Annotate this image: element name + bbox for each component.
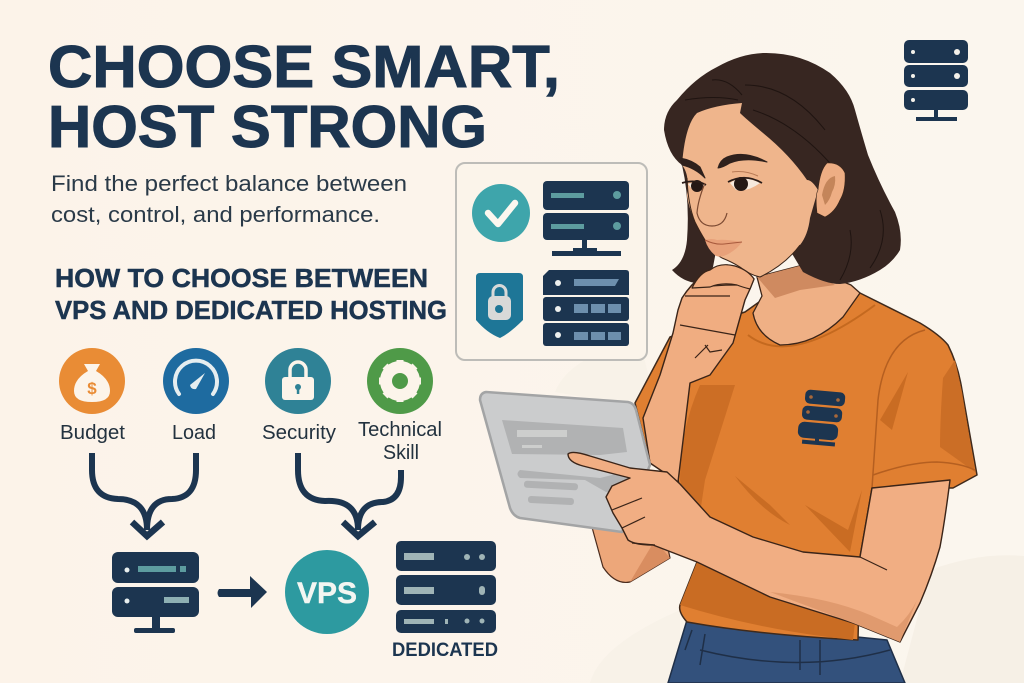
lips	[705, 239, 742, 257]
subtitle	[51, 171, 407, 227]
arrow: to VPS	[218, 576, 267, 608]
VPS badge: VPS	[297, 577, 357, 610]
back forearm	[590, 510, 670, 582]
shirt	[635, 293, 977, 640]
jeans	[668, 620, 905, 683]
illustration: woman	[480, 53, 977, 683]
hair	[664, 53, 901, 284]
title: CHOOSE SMART,	[48, 34, 560, 100]
heading: how to choose: HOW TO CHOOSE BETWEEN	[55, 263, 428, 293]
factor labels: Skill	[383, 442, 419, 464]
arrow: budget and load merge	[92, 453, 196, 536]
panel: server checks	[456, 163, 647, 360]
ear	[816, 163, 845, 217]
factor labels: Load	[172, 422, 216, 444]
icon: dedicated server	[396, 541, 496, 633]
pointing hand and forearm	[568, 452, 950, 642]
factor labels: Budget	[60, 422, 125, 444]
subtitle: cost, control, and performance.	[51, 202, 380, 227]
icon: small server	[112, 552, 199, 633]
icon: server top right	[904, 40, 968, 121]
heading: how to choose: VPS AND DEDICATED HOSTING	[55, 295, 447, 325]
fingers at chin	[692, 265, 754, 289]
icon: budget: $	[87, 379, 97, 398]
face	[682, 103, 818, 277]
icon: check	[472, 184, 530, 242]
title: HOST STRONG	[48, 94, 487, 160]
icon: server with stand	[543, 181, 629, 256]
eyebrows	[680, 154, 767, 178]
neck	[753, 265, 860, 345]
eyes	[682, 172, 762, 192]
icon: technical skill	[367, 348, 433, 414]
factor labels: Technical	[358, 419, 442, 441]
icon: load	[163, 348, 229, 414]
nose	[697, 183, 727, 226]
title	[48, 34, 560, 160]
arrow: security and skill merge	[298, 453, 401, 536]
VPS badge	[285, 550, 369, 634]
upper arm and thinking hand	[643, 265, 754, 482]
factor labels: Security	[262, 422, 336, 444]
label: dedicated: DEDICATED	[392, 640, 498, 661]
icon: shield lock	[476, 273, 523, 338]
icon: budget	[59, 348, 125, 414]
subtitle: Find the perfect balance between	[51, 171, 407, 196]
server logo on shirt	[797, 389, 846, 446]
tablet	[480, 392, 650, 532]
factor labels	[60, 419, 442, 464]
icon: server rack	[543, 270, 629, 346]
icon: security	[265, 348, 331, 414]
heading: how to choose	[55, 263, 447, 325]
